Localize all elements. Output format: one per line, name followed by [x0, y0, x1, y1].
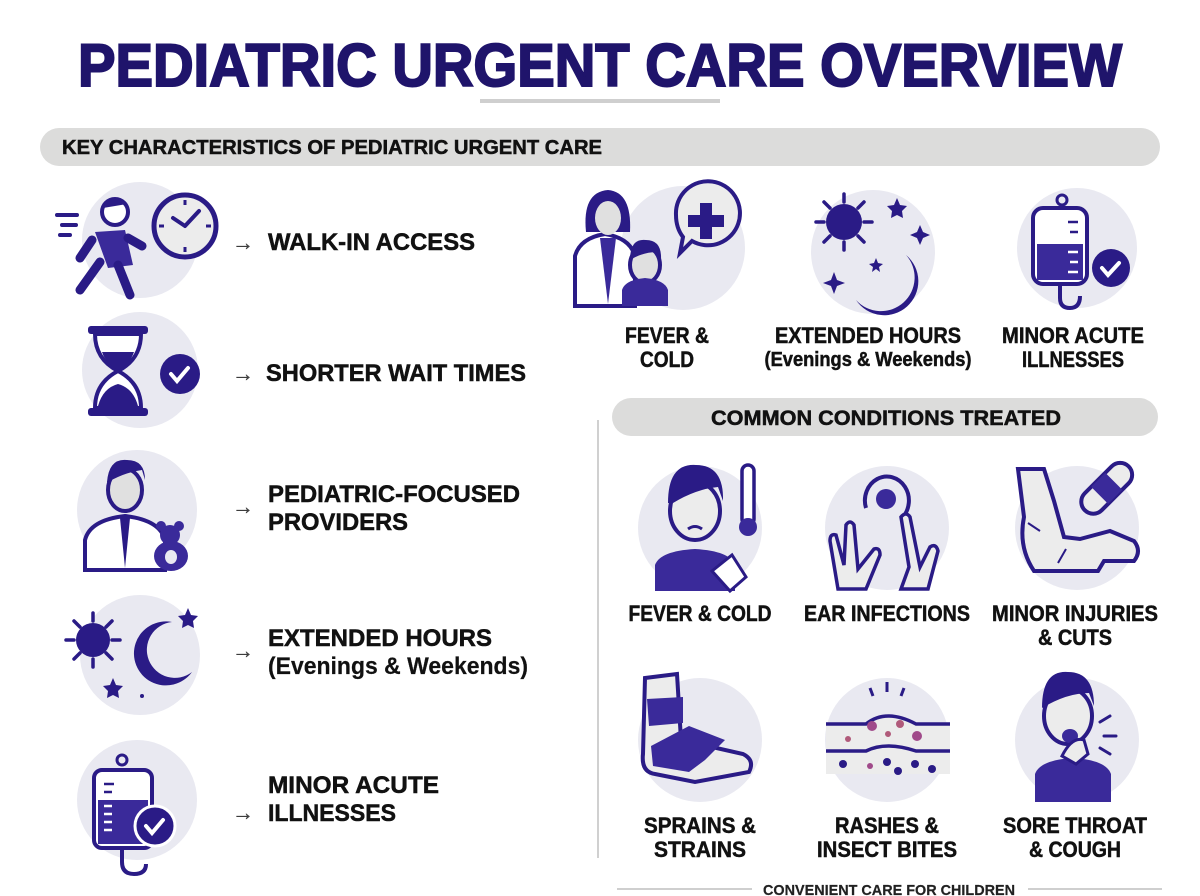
item: minor acute illnesses: ILLNESSES: [268, 800, 396, 827]
item: pediatric-focused providers: PROVIDERS: [268, 509, 408, 536]
top right: minor acute illnesses: MINOR ACUTE: [1002, 323, 1144, 348]
icon: doctor with teddy bear: [77, 450, 197, 571]
section header: common conditions treated: COMMON CONDITIONS TREATED: [711, 407, 1061, 430]
section header: key characteristics: [40, 128, 1160, 166]
item: walk-in access: →: [232, 230, 254, 255]
item: minor acute illnesses: [77, 740, 439, 874]
text: & COUGH: [1029, 837, 1121, 862]
item: shorter wait times: →: [232, 361, 254, 386]
condition: sore throat & cough: [1015, 672, 1139, 802]
text: STRAINS: [654, 837, 746, 862]
top right: extended hours: [764, 190, 972, 371]
text: RASHES &: [835, 813, 939, 838]
top right: minor acute illnesses: [1002, 188, 1144, 372]
item: extended hours: →: [232, 638, 254, 663]
icon: sun and moon: [66, 595, 200, 715]
text: SORE THROAT: [1003, 813, 1148, 838]
text: FEVER & COLD: [628, 601, 772, 626]
condition: sprains & strains: [638, 674, 762, 802]
item: minor acute illnesses: →: [232, 800, 254, 825]
item: walk-in access: WALK-IN ACCESS: [268, 229, 475, 256]
title: PEDIATRIC URGENT CARE OVERVIEW: [78, 32, 1122, 99]
condition: rashes & insect bites: [825, 678, 950, 802]
item: pediatric-focused providers: →: [232, 494, 254, 519]
top right: fever & cold (doctor with child): COLD: [640, 347, 694, 372]
text: MINOR INJURIES: [992, 601, 1158, 626]
text: & CUTS: [1038, 625, 1112, 650]
condition: ear infections: [825, 466, 949, 590]
item: extended hours: [66, 595, 528, 715]
section header: key characteristics: KEY CHARACTERISTICS OF PEDIATRIC URGENT CARE: [62, 137, 602, 159]
item: shorter wait times: SHORTER WAIT TIMES: [266, 360, 526, 387]
item: shorter wait times: [82, 312, 526, 428]
top right: extended hours: EXTENDED HOURS: [775, 323, 961, 348]
top right: fever & cold (doctor with child): FEVER &: [625, 323, 709, 348]
text: INSECT BITES: [817, 837, 957, 862]
item: walk-in access: [57, 182, 475, 298]
condition: fever & cold: [638, 465, 762, 591]
top right: minor acute illnesses: ILLNESSES: [1022, 347, 1124, 372]
text: SPRAINS &: [644, 813, 756, 838]
top right: extended hours: (Evenings & Weekends): [764, 349, 972, 371]
top right: fever & cold (doctor with child): [575, 181, 745, 372]
icon: hourglass with check: [82, 312, 200, 428]
section header: common conditions treated: [612, 398, 1158, 436]
item: pediatric-focused providers: PEDIATRIC-FOCUSED: [268, 481, 520, 508]
item: extended hours: (Evenings & Weekends): [268, 653, 528, 680]
item: extended hours: EXTENDED HOURS: [268, 625, 492, 652]
icon: running child with clock: [57, 182, 216, 298]
condition: minor injuries & cuts: [1015, 458, 1139, 590]
text: EAR INFECTIONS: [804, 601, 970, 626]
item: pediatric-focused providers: [77, 450, 520, 571]
item: minor acute illnesses: MINOR ACUTE: [268, 772, 439, 799]
icon: IV bag with check: [77, 740, 197, 874]
